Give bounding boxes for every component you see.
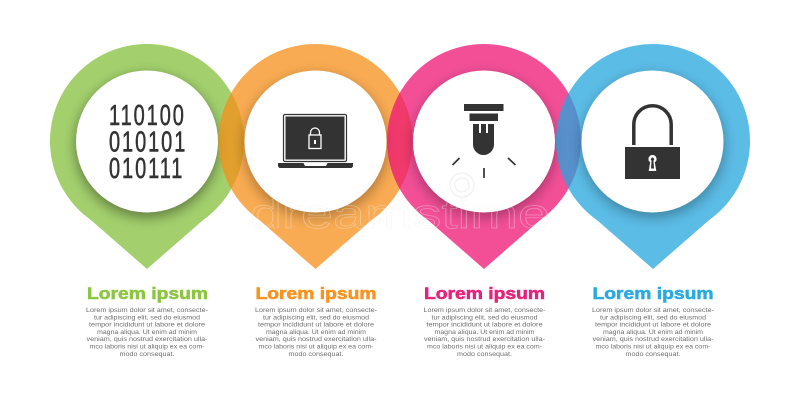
text block: step 2: [255, 285, 377, 358]
icon: binary code: 010111: [109, 154, 184, 185]
watermark: [250, 173, 550, 237]
text block: step 1: modo consequat.: [120, 351, 175, 358]
icon: binary code: 010101: [109, 127, 187, 158]
text block: step 3: veniam, quis nostrud exercitation ulla-: [424, 336, 545, 343]
text block: step 1: mco laboris nisi ut aliquip ex ea com-: [90, 344, 204, 350]
icon: sprinkler: [452, 104, 516, 178]
text block: step 1: tempor incididunt ut labore et dolore: [89, 322, 205, 329]
step 1: green pin with binary code icon: [50, 44, 244, 269]
text block: step 2: Lorem ipsum: [256, 285, 376, 303]
text block: step 2: veniam, quis nostrud exercitation ulla-: [256, 336, 376, 343]
text block: step 2: modo consequat.: [288, 351, 344, 358]
watermark: dreamstime: [250, 190, 550, 237]
text block: step 4: [592, 285, 714, 358]
text block: step 2: tur adipiscing elit, sed do eiusmod: [263, 314, 369, 321]
text block: step 4: tur adipiscing elit, sed do eiusmod: [600, 314, 706, 321]
text block: step 3: Lorem ipsum: [424, 285, 545, 303]
text block: step 1: veniam, quis nostrud exercitation ulla-: [86, 336, 208, 343]
text block: step 4: Lorem ipsum: [592, 285, 714, 303]
text block: step 3: tempor incididunt ut labore et dolore: [426, 322, 543, 329]
text block: step 1: Lorem ipsum dolor sit amet, consecte-: [86, 307, 208, 314]
text block: step 3: modo consequat.: [457, 351, 512, 358]
infographic canvas: [50, 44, 750, 358]
text block: step 3: mco laboris nisi ut aliquip ex ea com-: [427, 344, 542, 350]
text block: step 4: tempor incididunt ut labore et dolore: [595, 322, 711, 329]
text block: step 4: magna aliqua. Ut enim ad minim: [603, 329, 703, 336]
text block: step 2: Lorem ipsum dolor sit amet, consecte-: [255, 307, 377, 314]
text block: step 4: Lorem ipsum dolor sit amet, consecte-: [592, 307, 714, 314]
step 4: blue pin with padlock icon: [556, 44, 750, 269]
step 2: orange pin with locked laptop icon: [218, 44, 412, 269]
icon: binary code: 110100: [109, 101, 186, 132]
icon: binary code: [109, 101, 187, 185]
text block: step 1: [86, 285, 208, 358]
step 3: pink pin with fire sprinkler icon: [387, 44, 581, 269]
icon: padlock: [625, 106, 680, 179]
text block: step 1: Lorem ipsum: [87, 285, 208, 303]
text block: step 2: tempor incididunt ut labore et dolore: [258, 322, 374, 329]
text block: step 4: mco laboris nisi ut aliquip ex ea com-: [596, 344, 710, 350]
text block: step 1: magna aliqua. Ut enim ad minim: [97, 329, 197, 336]
text block: step 3: Lorem ipsum dolor sit amet, consecte-: [424, 307, 546, 314]
text block: step 2: magna aliqua. Ut enim ad minim: [266, 329, 366, 336]
text block: step 4: veniam, quis nostrud exercitation ulla-: [592, 336, 714, 343]
text block: step 3: [424, 285, 546, 358]
text block: step 1: tur adipiscing elit, sed do eiusmod: [94, 314, 200, 321]
text block: step 3: magna aliqua. Ut enim ad minim: [434, 329, 534, 336]
text block: step 4: modo consequat.: [626, 351, 681, 358]
text block: step 2: mco laboris nisi ut aliquip ex ea com-: [258, 344, 374, 350]
text block: step 3: tur adipiscing elit, sed do eiusmod: [432, 314, 538, 321]
icon: laptop with padlock: [278, 114, 353, 168]
